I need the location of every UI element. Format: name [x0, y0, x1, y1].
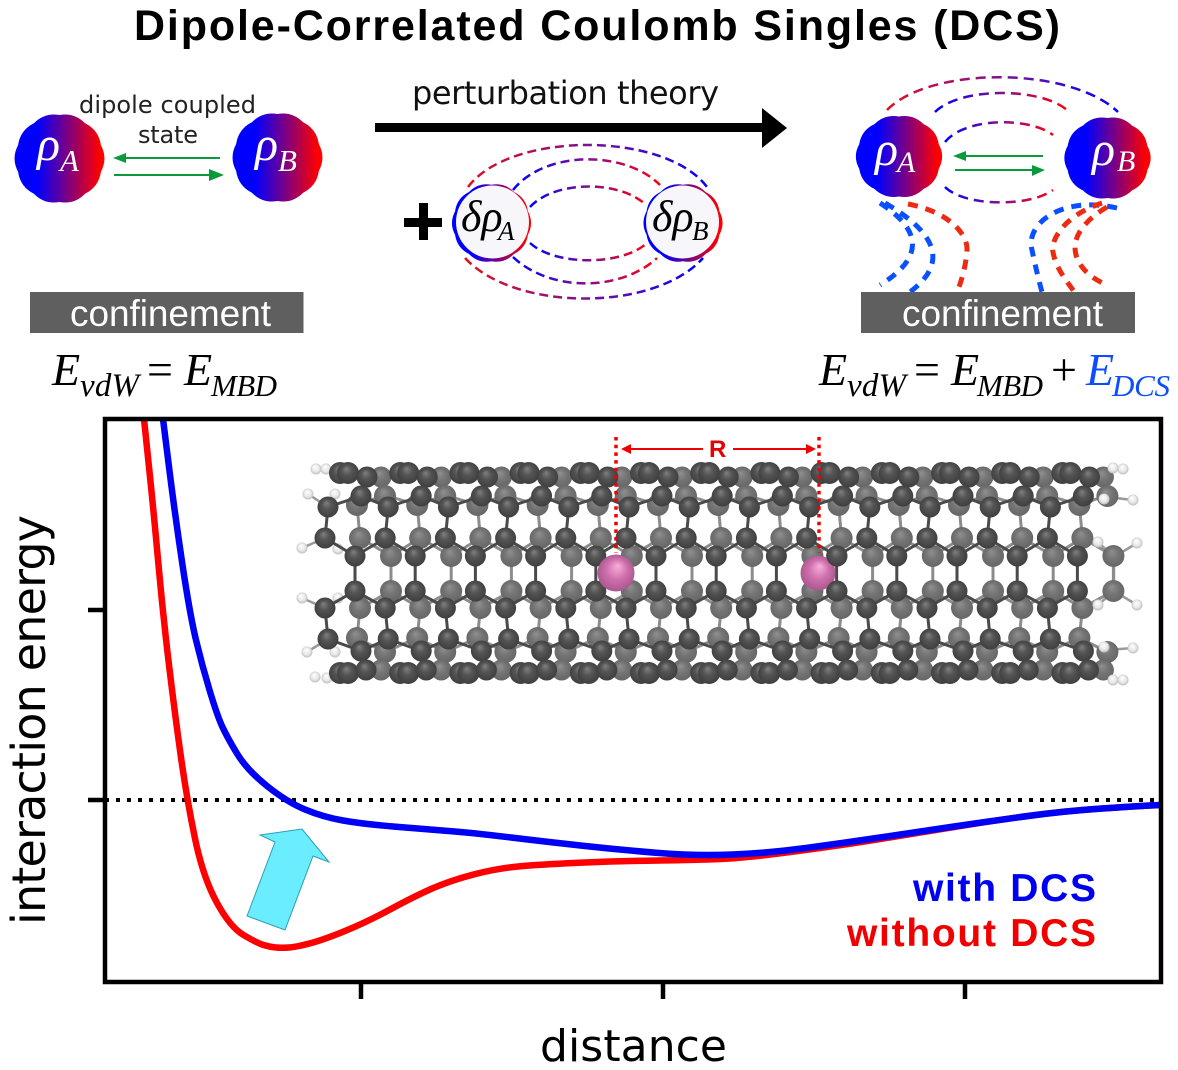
green coupling arrows	[113, 153, 224, 181]
equation left: E	[51, 344, 80, 395]
back wall bonds	[357, 477, 1113, 670]
distance marker R	[616, 436, 819, 553]
back wall atoms	[346, 466, 1124, 680]
confinement bar right: confinement	[902, 293, 1104, 334]
equation right: E	[818, 344, 847, 395]
carbon atoms over right pink atom	[826, 546, 848, 602]
title: Dipole-Correlated Coulomb Singles (DCS)	[134, 2, 1060, 50]
pink atom left	[598, 554, 634, 592]
equation right: E	[1085, 344, 1114, 395]
zero-energy dotted line	[105, 798, 1160, 802]
chart: interaction energy vs distance	[2, 419, 1161, 1070]
equation right: +	[1051, 344, 1077, 395]
y axis label: interaction energy	[2, 515, 56, 925]
confinement bar left: confinement	[70, 293, 272, 334]
plus sign	[404, 203, 442, 240]
density blob: rho A	[856, 116, 942, 197]
equation right	[818, 344, 1170, 404]
arrow: energy shift	[247, 829, 329, 930]
plot frame and ticks	[88, 419, 1161, 999]
equation left: =	[147, 344, 173, 395]
fluctuation: delta rho B: B	[692, 216, 708, 246]
density blob: rho B: B	[1117, 145, 1135, 178]
fluctuation: delta rho B	[643, 184, 723, 262]
density blob: rho B: ρ	[253, 118, 278, 171]
front wall atoms	[314, 462, 1100, 684]
density blob: rho B	[1064, 118, 1151, 198]
fluctuation: delta rho B: δρ	[652, 192, 694, 241]
equation left	[51, 344, 277, 404]
distance marker R: R	[709, 436, 726, 463]
thin dashed coupling lines	[887, 77, 1118, 202]
density blob: rho B: B	[278, 143, 297, 178]
panel: perturbation theory	[375, 74, 787, 298]
front wall bonds	[325, 496, 1083, 651]
equation right: MBD	[976, 368, 1043, 403]
arrow: perturbation	[375, 108, 787, 148]
curve: with DCS	[163, 419, 1160, 855]
panel: dipole coupled state	[15, 91, 322, 404]
pink atom right	[800, 556, 836, 590]
density blob: rho B	[233, 113, 322, 202]
label: perturbation theory: perturbation theory	[412, 74, 719, 112]
equation right: vdW	[847, 368, 908, 404]
density blob: rho A: ρ	[35, 118, 60, 171]
fluctuation: delta rho A: A	[496, 216, 515, 246]
legend: without DCS	[846, 912, 1096, 955]
fluctuation: delta rho A	[452, 184, 531, 262]
equation left: MBD	[210, 368, 277, 403]
density blob: rho A: A	[895, 146, 916, 179]
equation right: =	[914, 344, 940, 395]
label: dipole coupled state: dipole coupled	[79, 91, 256, 119]
density blob: rho A: A	[58, 143, 80, 178]
legend: with DCS	[912, 867, 1096, 910]
density blob: rho A: ρ	[873, 123, 898, 176]
label: dipole coupled state	[79, 91, 256, 149]
equation left: E	[183, 344, 212, 395]
density blob: rho A	[15, 114, 104, 203]
curve: without DCS	[144, 419, 1160, 948]
thick dashed confinement lines	[880, 203, 1117, 293]
equation left: vdW	[80, 368, 142, 404]
molecule: nanotube with two atoms	[296, 436, 1142, 686]
label: dipole coupled state: state	[138, 121, 198, 149]
hydrogen atoms over the right end	[1092, 462, 1128, 686]
panel: DCS coupled state	[818, 77, 1170, 404]
fluctuation: delta rho A: δρ	[461, 192, 503, 241]
hydrogen atoms and end bonds	[296, 464, 1142, 684]
green coupling arrows	[953, 151, 1045, 176]
equation right: DCS	[1111, 368, 1170, 403]
equation right: E	[950, 344, 979, 395]
dashed coupling lines	[465, 145, 707, 298]
legend	[846, 867, 1096, 955]
density blob: rho B: ρ	[1090, 123, 1115, 176]
